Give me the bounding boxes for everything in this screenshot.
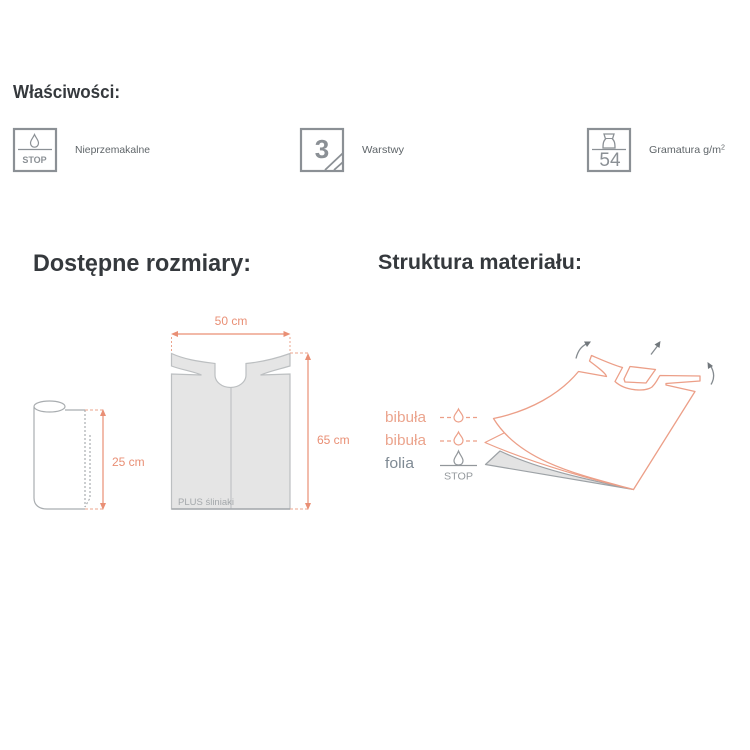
- arrow: right strap: [708, 362, 714, 384]
- dimension: 50 cm: [171, 314, 290, 353]
- label: tissue middle: bibuła: [385, 432, 427, 449]
- label: waterproof: Nieprzemakalne: [75, 144, 150, 156]
- label: tissue middle: [385, 432, 478, 449]
- label: foil: STOP: [444, 470, 473, 482]
- arrow: neck flap: [651, 341, 660, 354]
- dimension: 65 cm: [290, 353, 350, 510]
- center fold: [230, 388, 232, 509]
- icon: weight 54: 54: [599, 150, 621, 171]
- roll shape: [34, 401, 90, 509]
- layer: foil: [486, 451, 634, 490]
- label: grammage: 2: [721, 144, 725, 152]
- label: foil: folia: [385, 455, 415, 472]
- diagram: roll: [34, 401, 145, 510]
- dimension: 65 cm: 65 cm: [317, 433, 350, 447]
- layer: tissue 1 with straps: [494, 356, 700, 490]
- icon: three layers: 3: [315, 134, 329, 164]
- arrow: left strap: [576, 342, 591, 358]
- property: grammage: [588, 129, 725, 171]
- dimension: 25 cm: 25 cm: [112, 455, 145, 469]
- dimension: 50 cm: 50 cm: [215, 314, 247, 328]
- property: waterproof: [14, 129, 150, 171]
- bottom edge: [172, 508, 290, 510]
- brand label: PLUS śliniaki: [178, 497, 234, 508]
- diagram: material structure: [385, 341, 714, 490]
- icon: drop stop: STOP: [22, 155, 47, 165]
- bib shape: [172, 354, 290, 509]
- layer: tissue 2: [485, 432, 634, 490]
- label: foil: [385, 451, 477, 482]
- neck flap: [624, 366, 656, 383]
- diagram: bib: [171, 314, 350, 510]
- label: tissue top: bibuła: [385, 409, 427, 426]
- heading: properties: Właściwości:: [13, 82, 120, 102]
- heading: available sizes: Dostępne rozmiary:: [33, 250, 251, 277]
- label: grammage: Gramatura g/m: [649, 144, 720, 156]
- property: layers: [301, 129, 405, 171]
- label: layers: Warstwy: [362, 144, 405, 156]
- label: tissue top: [385, 409, 478, 426]
- heading: material structure: Struktura materiału:: [378, 251, 582, 274]
